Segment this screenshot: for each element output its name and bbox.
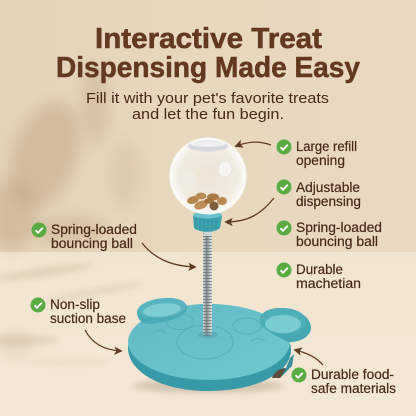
callout: Non-slip suction base: Non-slip xyxy=(50,297,100,312)
callout: Durable machetian: machetian xyxy=(296,276,361,291)
subtitle: and let the fun begin. xyxy=(132,107,284,123)
callout: Durable machetian xyxy=(276,262,361,291)
product: treat dispenser xyxy=(128,138,311,393)
left ear cup xyxy=(137,296,187,324)
base top xyxy=(128,304,290,380)
callout: Spring-loaded bouncing ball (left): Spring-loaded xyxy=(51,222,137,237)
callout: Spring-loaded bouncing ball (right): Spring-loaded xyxy=(296,220,382,235)
right ear cup xyxy=(260,308,311,342)
callout: Spring-loaded bouncing ball (left): bouncing ball xyxy=(51,236,133,251)
spring base shadow xyxy=(198,332,218,338)
arrow: food-safe materials xyxy=(295,350,323,365)
callout: Durable food-safe materials: safe materials xyxy=(311,381,396,396)
callout: Durable food-safe materials xyxy=(292,367,396,396)
callout: Spring-loaded bouncing ball (right) xyxy=(276,220,382,249)
base notch xyxy=(272,354,294,378)
callout: Spring-loaded bouncing ball (left) xyxy=(32,222,137,251)
glass ball xyxy=(170,138,246,214)
arrow: adjustable dispensing xyxy=(226,198,274,222)
callout: Non-slip suction base xyxy=(30,297,126,326)
callout: Spring-loaded bouncing ball (right): bouncing ball xyxy=(296,234,378,249)
subtitle: Fill it with your pet's favorite treats xyxy=(86,91,329,107)
callout: Non-slip suction base: suction base xyxy=(50,311,126,326)
callout: Large refill opening xyxy=(276,139,357,168)
callout: Durable machetian: Durable xyxy=(296,262,343,277)
bear face embossing xyxy=(153,314,265,359)
arrow: spring-loaded xyxy=(142,243,195,267)
title: Interactive Treat xyxy=(95,23,322,55)
collar xyxy=(193,212,222,236)
background floor xyxy=(0,252,416,416)
treats xyxy=(186,193,227,211)
title xyxy=(56,23,360,84)
callout: Large refill opening: opening xyxy=(296,153,345,168)
title: Dispensing Made Easy xyxy=(56,52,360,84)
subtitle xyxy=(86,91,329,123)
base shadow xyxy=(132,379,284,393)
arrow: suction base xyxy=(85,330,121,351)
callout: Adjustable dispensing: Adjustable xyxy=(296,180,360,195)
spring xyxy=(203,231,212,336)
callout: Adjustable dispensing xyxy=(276,180,361,209)
base body xyxy=(128,304,291,391)
callout: Adjustable dispensing: dispensing xyxy=(296,194,361,209)
background wall xyxy=(0,0,416,252)
arrow: refill opening xyxy=(236,142,271,146)
callout: Large refill opening: Large refill xyxy=(296,139,357,154)
callout: Durable food-safe materials: Durable food- xyxy=(311,367,394,382)
leaf shadows xyxy=(0,65,145,366)
